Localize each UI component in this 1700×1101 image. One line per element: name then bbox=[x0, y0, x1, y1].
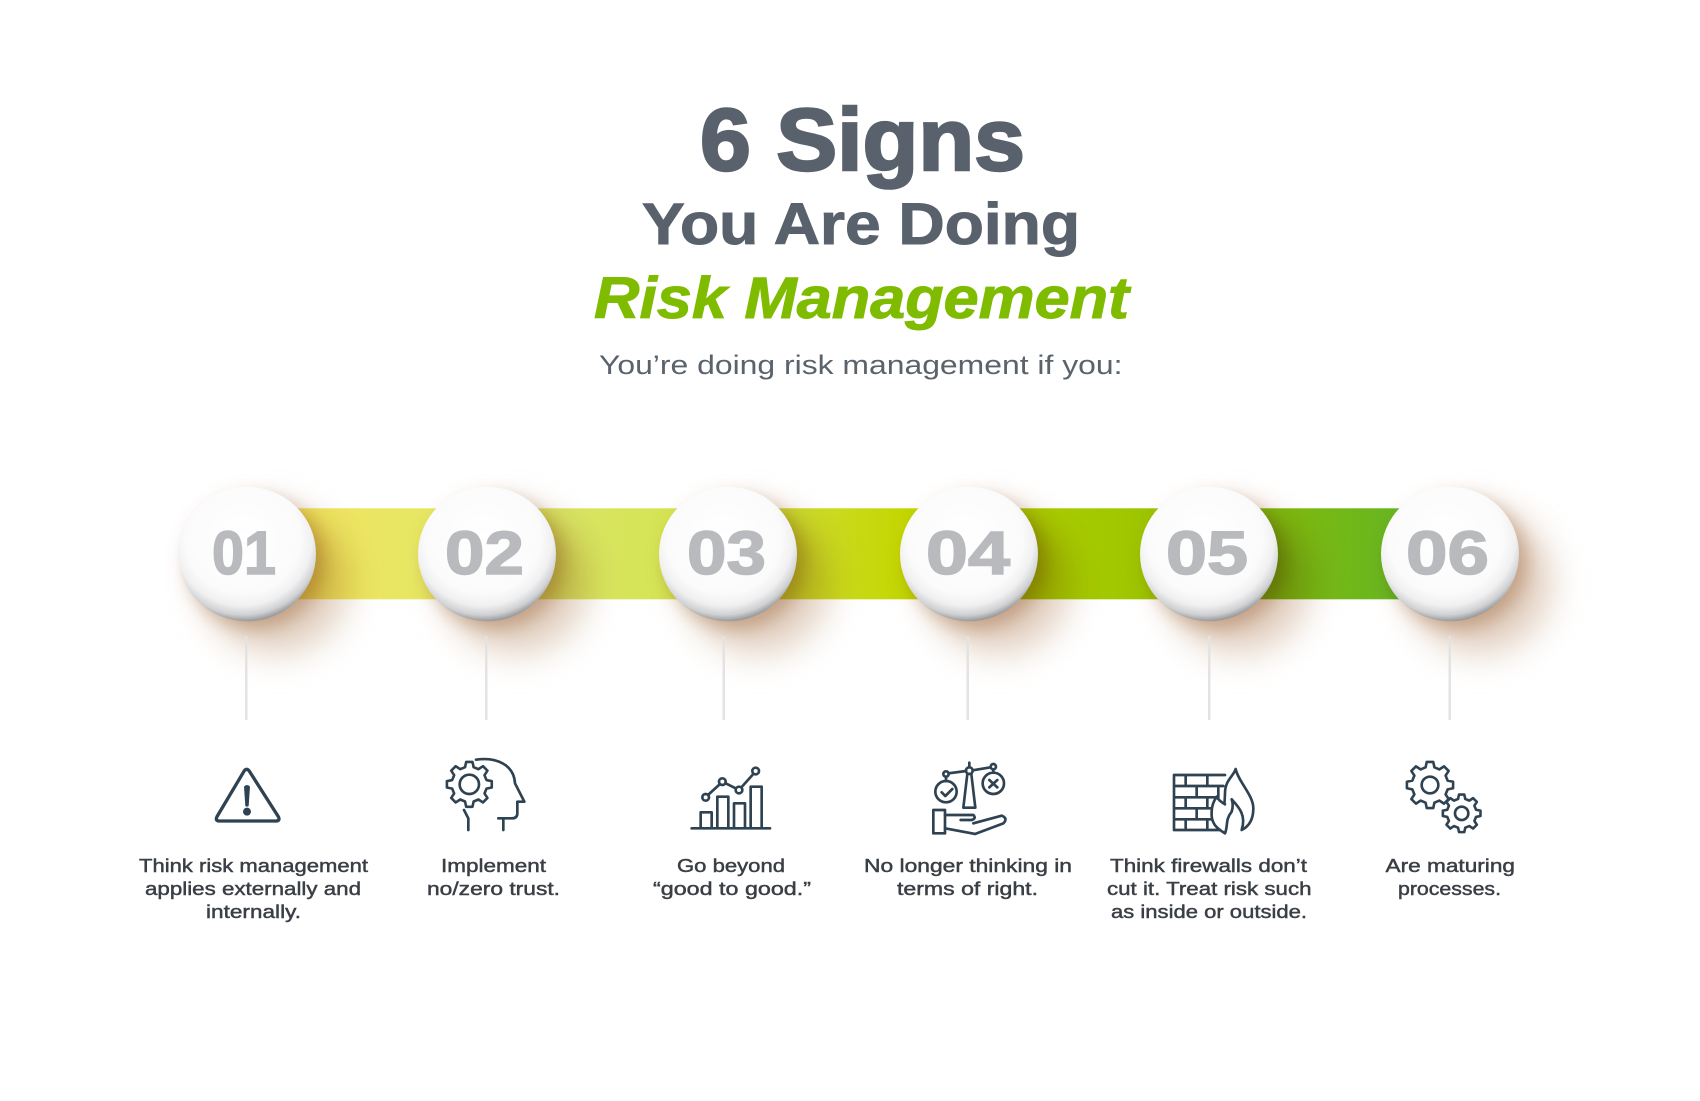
step 06 sphere: 06 bbox=[1406, 519, 1489, 587]
text: step 03: “good to good.” bbox=[653, 878, 811, 899]
text: step 02 bbox=[427, 855, 560, 899]
text: step 01 bbox=[139, 855, 368, 922]
text: step 01: Think risk management bbox=[139, 855, 368, 876]
step 01 sphere bbox=[178, 487, 349, 654]
icon: head with gear bbox=[447, 759, 524, 830]
icon: firewall with flame bbox=[1174, 769, 1253, 833]
text: step 05: Think firewalls don’t bbox=[1110, 855, 1307, 876]
text: step 05 bbox=[1107, 855, 1312, 922]
step 04 sphere bbox=[900, 487, 1071, 654]
title: 6 Signs: 6 Signs bbox=[700, 90, 1025, 189]
step 02 sphere bbox=[418, 487, 589, 654]
heading: You Are Doing: You Are Doing bbox=[642, 192, 1080, 257]
title block bbox=[594, 90, 1132, 380]
step 05 sphere: 05 bbox=[1166, 519, 1248, 587]
step 02 sphere: 02 bbox=[445, 519, 524, 587]
heading: Risk Management: Risk Management bbox=[594, 266, 1132, 331]
text: step 03: Go beyond bbox=[677, 855, 785, 876]
text: step 05: cut it. Treat risk such bbox=[1107, 878, 1312, 899]
text: step 02: Implement bbox=[441, 855, 546, 876]
text: step 06 bbox=[1386, 855, 1515, 899]
step 03 sphere bbox=[659, 487, 830, 654]
icon: scales on a hand bbox=[933, 763, 1005, 834]
text: step 03 bbox=[653, 855, 811, 899]
step 06 sphere bbox=[1381, 487, 1552, 654]
step 05 sphere bbox=[1140, 487, 1311, 654]
text: step 06: Are maturing bbox=[1386, 855, 1515, 876]
text: step 04 bbox=[864, 855, 1072, 899]
step 01 sphere: 01 bbox=[212, 519, 276, 587]
step 03 sphere: 03 bbox=[687, 519, 766, 587]
icon: rising bar chart bbox=[692, 768, 770, 828]
icon: two gears bbox=[1407, 762, 1480, 832]
text: step 04: terms of right. bbox=[897, 878, 1038, 899]
text: step 04: No longer thinking in bbox=[864, 855, 1072, 876]
icon: warning triangle bbox=[216, 769, 279, 821]
text: step 06: processes. bbox=[1398, 878, 1501, 899]
text: step 02: no/zero trust. bbox=[427, 878, 560, 899]
text: step 01: internally. bbox=[206, 901, 301, 922]
text: step 05: as inside or outside. bbox=[1111, 901, 1307, 922]
step 04 sphere: 04 bbox=[926, 519, 1010, 587]
gradient band bbox=[280, 508, 1420, 599]
subtitle: You’re doing risk management if you: bbox=[599, 350, 1122, 380]
text: step 01: applies externally and bbox=[145, 878, 361, 899]
